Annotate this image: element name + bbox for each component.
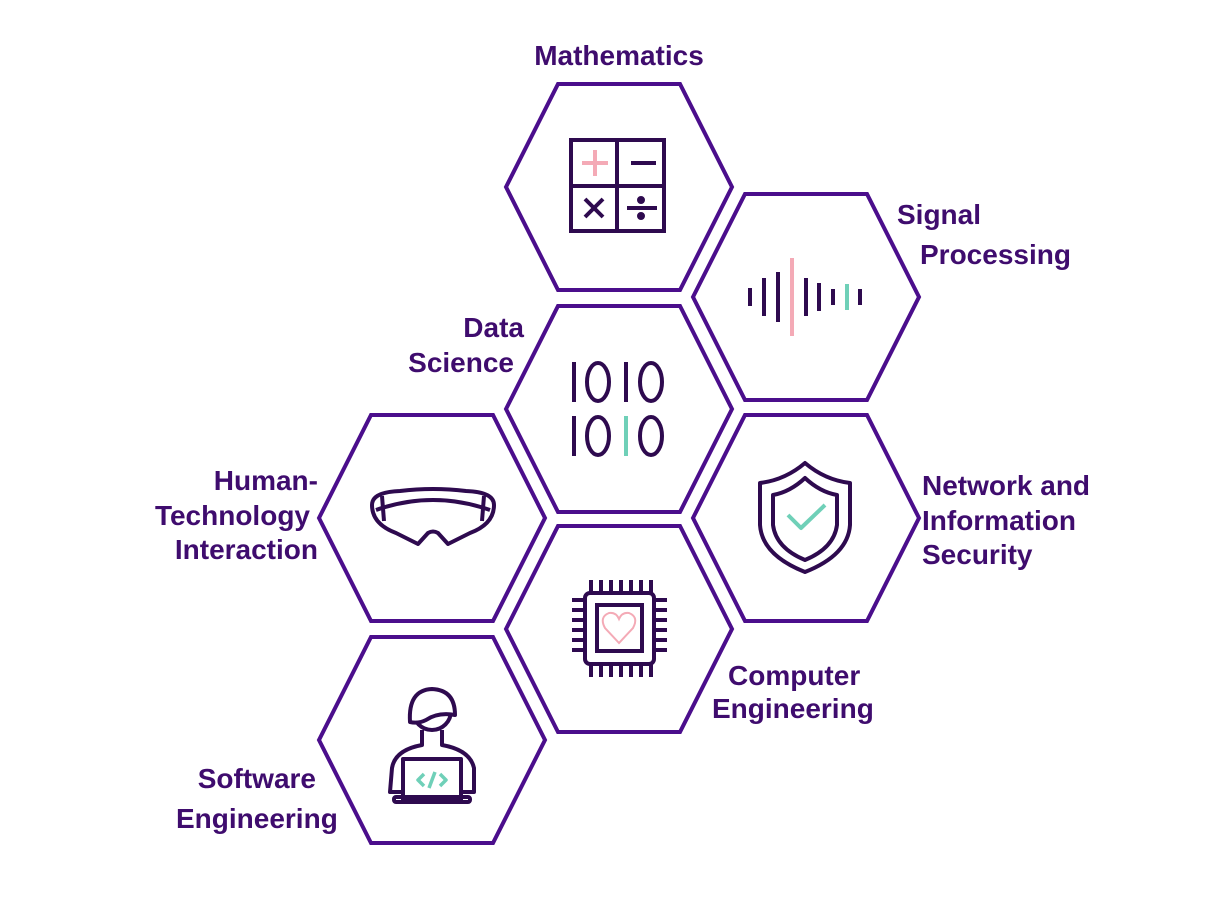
label: Software Engineering: Engineering: [176, 803, 338, 834]
label: Signal Processing: Processing: [920, 239, 1071, 270]
icon: VR goggles: [372, 489, 494, 544]
icon: shield with check: [760, 463, 850, 572]
label: Human-Technology Interaction: Interaction: [175, 534, 318, 565]
label: Software Engineering: [176, 763, 338, 834]
title: Mathematics: Mathematics: [534, 40, 704, 71]
icon: chip with heart: [572, 580, 667, 677]
panel: data science hexagon: [506, 306, 732, 512]
label: Computer Engineering: [712, 660, 874, 724]
label: Computer Engineering: Engineering: [712, 693, 874, 724]
icon: binary digits: [574, 362, 662, 456]
panel: human-technology hexagon: [319, 415, 545, 621]
label: Network and Information Security: [922, 470, 1090, 570]
label: Human-Technology Interaction: Technology: [155, 500, 310, 531]
icon: calculator grid: [571, 140, 664, 231]
panel: mathematics hexagon: [506, 84, 732, 290]
label: Data Science: Data: [463, 312, 524, 343]
icon: person at laptop: [390, 689, 474, 802]
label: Data Science: [408, 312, 524, 378]
label: Software Engineering: Software: [198, 763, 316, 794]
label: Network and Information Security: Security: [922, 539, 1033, 570]
panel: network security hexagon: [693, 415, 919, 621]
label: Computer Engineering: Computer: [728, 660, 860, 691]
label: Human-Technology Interaction: [155, 465, 318, 565]
label: Data Science: Science: [408, 347, 514, 378]
icon: sound wave: [750, 258, 860, 336]
label: Network and Information Security: Information: [922, 505, 1076, 536]
label: Network and Information Security: Network and: [922, 470, 1090, 501]
panel: computer engineering hexagon: [506, 526, 732, 732]
label: Signal Processing: Signal: [897, 199, 981, 230]
panel: software engineering hexagon: [319, 637, 545, 843]
panel: signal processing hexagon: [693, 194, 919, 400]
label: Signal Processing: [897, 199, 1071, 270]
label: Human-Technology Interaction: Human-: [214, 465, 318, 496]
